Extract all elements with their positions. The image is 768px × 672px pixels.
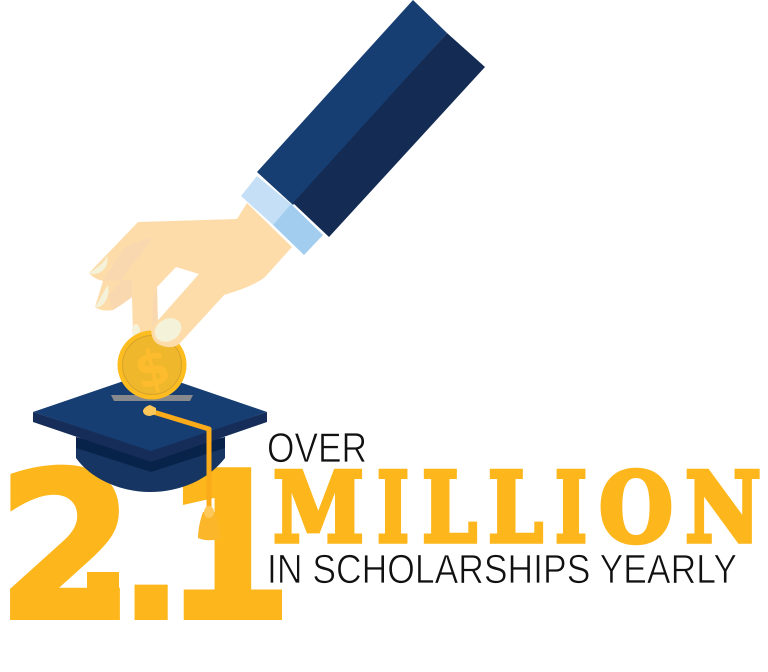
headline: MILLION: I <box>555 452 587 565</box>
headline: MILLION: O <box>599 452 673 565</box>
coin rim <box>118 330 186 400</box>
headline: MILLION: I <box>377 452 409 565</box>
big number: 2.1: 1 <box>164 429 293 666</box>
fingernail: pinky <box>89 256 108 274</box>
sleeve <box>257 0 447 205</box>
icon: dollar coin <box>118 330 186 401</box>
upturned foot of the 2 <box>87 572 119 620</box>
tassel body <box>198 512 220 540</box>
headline: MILLION: L <box>488 452 543 565</box>
thumb shape <box>151 270 235 347</box>
cuff: blue <box>273 204 323 255</box>
big number: 2.1: . <box>120 465 183 658</box>
cap board edge <box>33 412 267 462</box>
cuff: light <box>241 176 291 225</box>
coin face <box>122 336 182 394</box>
headline: MILLION: M <box>273 452 364 565</box>
headline: MILLION <box>273 452 761 565</box>
cap band <box>76 437 225 472</box>
icon: graduation cap <box>33 372 267 492</box>
tassel cord <box>150 411 209 512</box>
coin slot <box>111 395 193 401</box>
dollar sign: $ <box>128 337 176 401</box>
cap base <box>76 437 225 492</box>
tassel button <box>143 405 156 416</box>
hand <box>89 203 292 343</box>
headline: OVER: OVER <box>267 424 367 471</box>
big number: 2.1: 2 <box>0 429 135 666</box>
cap board top <box>33 372 267 451</box>
big number: 2.1 <box>0 429 293 666</box>
sleeve shadow <box>293 33 485 237</box>
finger shading <box>103 237 158 328</box>
tassel knot <box>204 506 214 518</box>
thumbnail <box>150 313 186 347</box>
illustration: arm and hand <box>89 0 485 343</box>
thumb <box>150 270 235 347</box>
icon: tassel <box>143 405 220 540</box>
fingernail: ring <box>95 285 109 307</box>
fingernail: index <box>132 324 140 338</box>
headline: MILLION: L <box>422 452 477 565</box>
